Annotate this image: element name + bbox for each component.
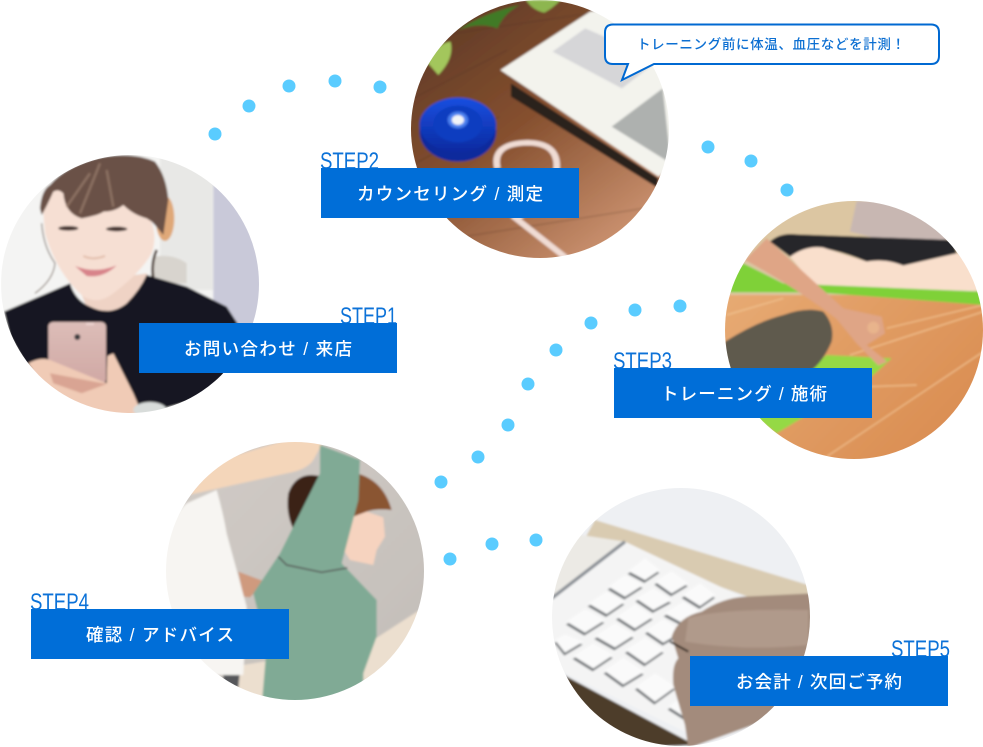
step 2 number: STEP2 [320, 148, 379, 175]
dotted connector: step 4 to step 5 [444, 534, 542, 566]
photo: trainer stretching woman's arm [163, 440, 430, 707]
step 2 title: カウンセリング / 測定 [357, 184, 543, 204]
speech bubble callout [605, 24, 939, 80]
step 3 label [613, 348, 872, 418]
step 1 number: STEP1 [340, 303, 397, 330]
step 4 number: STEP4 [30, 589, 89, 616]
step 4 title: 確認 / アドバイス [86, 625, 234, 645]
step 5 number: STEP5 [891, 636, 950, 663]
step 1 bar [139, 323, 397, 373]
photo: hand pressing calculator keys [545, 485, 818, 747]
step 3 bar [614, 368, 872, 418]
dotted connector: step 3 to step 4 [434, 300, 686, 488]
step 2 label [320, 148, 579, 218]
photo: yoga on green mat [723, 195, 983, 468]
step 1 title: お問い合わせ / 来店 [184, 339, 352, 359]
step 4 label [30, 589, 289, 659]
step 5 title: お会計 / 次回ご予約 [736, 672, 902, 692]
callout text: トレーニング前に体温、血圧などを計測！ [637, 36, 905, 52]
step 2 bar [321, 168, 579, 218]
photo: woman looking at smartphone [0, 150, 267, 418]
step 3 number: STEP3 [613, 348, 672, 375]
step 4 bar [31, 609, 289, 659]
step 5 bar [690, 656, 948, 706]
dotted connector: step 2 to step 3 [702, 140, 794, 196]
photo: scale and measuring tape on wooden table [402, 0, 679, 263]
step 1 label [139, 303, 397, 373]
step 5 label [690, 636, 950, 706]
step 3 title: トレーニング / 施術 [661, 384, 827, 404]
dotted connector: step 1 to step 2 [208, 74, 386, 140]
